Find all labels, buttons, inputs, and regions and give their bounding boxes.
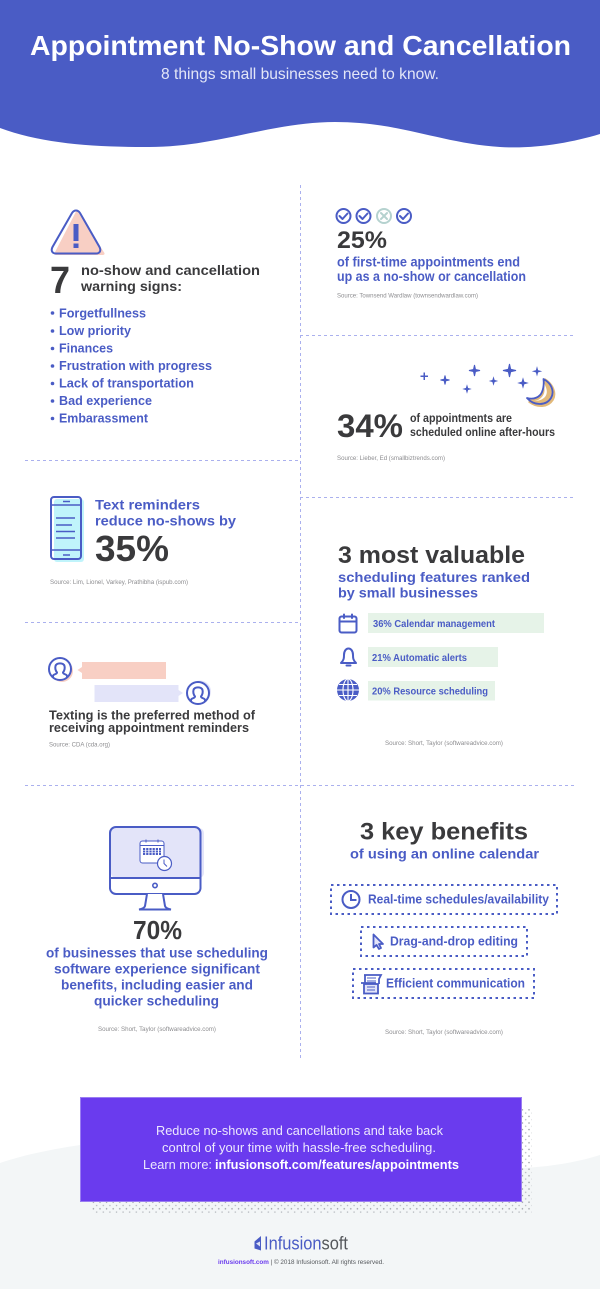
subtitle: 8 things small businesses need to know. xyxy=(161,66,439,83)
source: Source: Short, Taylor (softwareadvice.com) xyxy=(98,1026,216,1033)
call to action text xyxy=(143,1124,459,1172)
text: texting preferred: Texting is the preferred method of xyxy=(49,708,256,722)
benefit: efficient communication xyxy=(353,969,534,998)
text: scheduled after-hours xyxy=(410,413,555,439)
bar: automatic alerts xyxy=(368,647,498,667)
benefit: real-time schedules xyxy=(331,885,557,914)
list of warning signs: Finances xyxy=(59,342,113,356)
source: Source: Townsend Wardlaw (townsendwardlaw.com) xyxy=(337,292,478,300)
icon: avatar left xyxy=(49,658,73,682)
subheading: scheduling features ranked xyxy=(338,569,530,585)
panel: 25 percent first-time xyxy=(336,209,526,300)
text: scheduling software benefits: software experience significant xyxy=(54,962,261,976)
source: Source: Short, Taylor (softwareadvice.com) xyxy=(385,1029,503,1036)
source: Source: Short, Taylor (softwareadvice.com) xyxy=(385,740,503,747)
footer text: infusionsoft.com | © 2018 Infusionsoft. All rights reserved. xyxy=(218,1258,384,1266)
chat bubble lavender xyxy=(94,685,183,702)
text: first-time appointments: up as a no-show or cancellation xyxy=(337,269,526,284)
bar: calendar management: 36% Calendar management xyxy=(373,619,496,630)
icon: desktop monitor with calendar xyxy=(110,827,204,910)
panel: 3 key benefits xyxy=(331,818,557,1036)
logo: Infusionsoft: Infusionsoft xyxy=(264,1232,348,1254)
icon: warning triangle xyxy=(52,210,103,254)
text: scheduled after-hours: scheduled online after-hours xyxy=(410,427,555,439)
list of warning signs: Low priority xyxy=(59,324,131,338)
text: reduce no-shows: reduce no-shows by xyxy=(95,512,236,528)
text: texting preferred xyxy=(49,708,256,735)
big number 7: 7 xyxy=(50,260,70,302)
call to action box xyxy=(80,1098,532,1213)
icon: phone xyxy=(51,497,84,562)
heading: warning signs: no-show and cancellation xyxy=(81,263,260,278)
panel: warning signs xyxy=(50,210,260,426)
call to action text: control of your time with hassle-free scheduling. xyxy=(162,1141,436,1155)
text: scheduling software benefits: benefits, including easier and xyxy=(61,978,253,992)
text: reduce no-shows xyxy=(95,496,236,528)
list of warning signs: Forgetfullness xyxy=(59,306,146,320)
panel: 3 most valuable features xyxy=(337,542,544,747)
heading: warning signs xyxy=(80,263,260,294)
list of warning signs: Frustration with progress xyxy=(59,359,212,373)
panel: texting preferred xyxy=(49,658,256,748)
text: first-time appointments: of first-time appointments end xyxy=(337,254,520,270)
source: Source: CDA (cda.org) xyxy=(49,742,110,748)
bar: resource scheduling xyxy=(368,681,495,700)
subheading: of using an online calendar xyxy=(350,846,540,862)
text: scheduling software benefits xyxy=(46,946,268,1008)
stat: 35%: 35% xyxy=(95,528,169,569)
icon: stars and moon xyxy=(420,364,555,406)
panel: text reminders 35 percent xyxy=(50,496,236,586)
benefit: drag-and-drop: Drag-and-drop editing xyxy=(390,934,518,948)
panel: 70 percent of businesses xyxy=(46,827,268,1033)
header banner xyxy=(0,0,600,147)
stat: 25%: 25% xyxy=(337,227,387,254)
text: scheduling software benefits: of businesses that use scheduling xyxy=(46,946,268,960)
icon: bell xyxy=(341,648,356,666)
bar: calendar management xyxy=(368,613,544,633)
chat bubble pink xyxy=(78,662,166,679)
icon: avatar right xyxy=(187,680,211,704)
icon: check marks row xyxy=(336,209,411,223)
source: Source: Lieber, Ed (smallbiztrends.com) xyxy=(337,455,445,462)
list of warning signs: Embarassment xyxy=(59,412,149,426)
benefit: efficient communication: Efficient communication xyxy=(386,976,525,990)
heading: warning signs: warning signs: xyxy=(80,279,182,294)
bar: resource scheduling: 20% Resource scheduling xyxy=(372,686,488,698)
call to action text: infusionsoft.com/features/appointments xyxy=(215,1158,459,1172)
panel: 34 percent after-hours xyxy=(337,364,555,462)
title: Appointment No-Show and Cancellation xyxy=(30,30,571,61)
text: first-time appointments xyxy=(337,254,526,284)
call to action text: Learn more: xyxy=(143,1158,212,1172)
heading: 3 most valuable xyxy=(338,542,525,569)
subheading: by small businesses xyxy=(338,584,478,600)
benefit: drag-and-drop xyxy=(361,927,527,956)
list of warning signs: Lack of transportation xyxy=(59,376,194,390)
list of warning signs: Bad experience xyxy=(59,394,152,408)
stat: 34%: 34% xyxy=(337,408,403,444)
icon: calendar xyxy=(340,614,356,632)
icon: globe xyxy=(337,679,359,701)
list of warning signs xyxy=(51,306,212,426)
call to action text: Reduce no-shows and cancellations and take back xyxy=(156,1124,444,1138)
stat: 70%: 70% xyxy=(133,915,182,945)
benefit: real-time schedules: Real-time schedules/availability xyxy=(368,892,549,906)
source: Source: Lim, Lionel, Varkey, Prathibha (ispub.com) xyxy=(50,579,188,586)
subheading xyxy=(338,569,530,600)
text: texting preferred: receiving appointment reminders xyxy=(49,721,249,735)
text: scheduled after-hours: of appointments are xyxy=(410,413,512,425)
text: reduce no-shows: Text reminders xyxy=(95,496,200,512)
bar: automatic alerts: 21% Automatic alerts xyxy=(372,653,467,664)
heading: 3 key benefits xyxy=(360,818,528,846)
footer background wave xyxy=(0,1137,600,1289)
text: scheduling software benefits: quicker scheduling xyxy=(94,994,219,1008)
